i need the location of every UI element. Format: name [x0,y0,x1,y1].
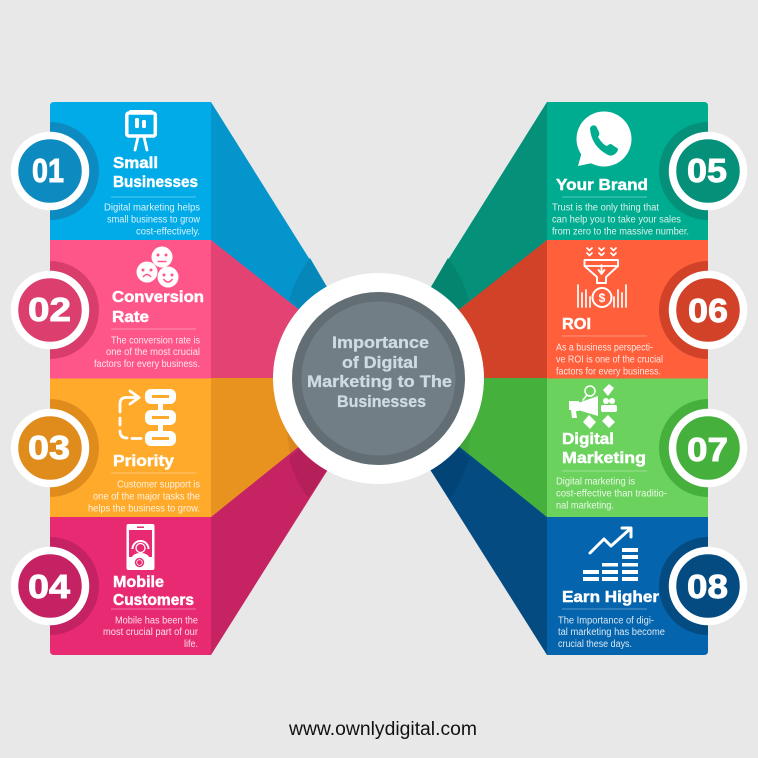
number badge 07 [659,399,744,497]
panel 01: small businesses [14,102,379,379]
card 08 [547,517,708,655]
number badge 06 [659,261,744,359]
card 02 [50,240,211,378]
description 02 [94,336,200,370]
heading 04: Customers [113,592,194,609]
central title: Marketing to The [307,373,452,391]
description 01: small business to grow [107,214,201,226]
heading 02: Conversion [112,289,204,306]
heading 07 [562,431,646,467]
icon: priority flow [120,389,176,446]
panel 05: your brand [379,102,744,379]
description 01: Digital marketing helps [104,202,200,214]
panel 03: priority [14,378,379,517]
description 07 [556,476,667,512]
description 03: one of the major tasks the [93,492,200,502]
description 01: cost-effectively. [136,226,200,238]
panel 06: ROI [379,240,744,379]
heading 04: Mobile [113,574,164,591]
fold 01 [211,102,379,379]
description 08 [558,616,665,650]
description 06: ve ROI is one of the crucial [556,354,663,366]
description 04: life. [184,639,198,650]
heading 07: Marketing [562,450,646,467]
card 04 [50,517,211,655]
description 04: most crucial part of our [103,627,199,638]
panel 04: mobile customers [14,379,379,655]
icon: funnel with coin: $ [599,291,606,305]
description 06: As a business perspecti- [556,342,653,354]
panel 07: digital marketing [379,378,744,517]
heading 06: ROI [562,316,591,333]
central title: Importance [332,334,429,352]
fold 07 [379,378,547,517]
heading 02: Rate [112,309,149,326]
number badge 08: 08 [687,568,728,605]
fold 05 [379,102,547,379]
central title: Businesses [337,393,426,411]
number badge 04: 04 [28,568,71,605]
icon: presentation board [127,110,155,150]
description 06: factors for every business. [556,366,661,378]
card 07 [547,378,708,517]
card 05 [547,102,708,240]
number badge 02: 02 [28,291,71,328]
description 05: Trust is the only thing that [552,202,659,214]
number badge 06: 06 [688,292,728,329]
icon: three faces [136,246,178,288]
fold 08 [379,379,547,655]
number badge 05: 05 [687,152,727,189]
description 03 [88,480,200,514]
number badge 04 [14,537,99,635]
description 07: Digital marketing is [556,476,635,488]
heading 01: Small [113,155,158,172]
description 08: crucial these days. [558,639,632,650]
description 02: one of the most crucial [106,347,200,358]
central title: of Digital [342,354,418,372]
number badge 01 [14,122,99,220]
fold 06 [379,240,547,379]
icon: rising chart [583,528,638,581]
icon: funnel with coin [578,248,626,307]
heading 07: Digital [562,431,614,448]
central circle [273,273,484,484]
description 08: tal marketing has become [558,627,665,638]
number badge 02 [14,261,99,359]
description 01 [104,202,201,238]
number badge 03: 03 [28,429,70,466]
number badge 07: 07 [687,431,728,468]
number badge 05 [659,122,744,220]
fold 03 [211,378,379,517]
footer website: www.ownlydigital.com [288,719,477,740]
card 06 [547,240,708,378]
description 03: helps the business to grow. [88,504,200,514]
number badge 03 [14,399,99,497]
heading 01: Businesses [113,174,198,191]
number badge 08 [659,537,744,635]
panel 02: conversion rate [14,240,379,379]
fold 02 [211,240,379,379]
number badge 01: 01 [32,152,64,189]
description 02: The conversion rate is [111,336,200,346]
description 07: cost-effective than traditio- [556,488,667,500]
card 03 [50,378,211,517]
icon: mobile support agent [126,524,154,570]
card 01 [50,102,211,240]
icon: megaphone and marketing symbols [569,384,617,429]
description 03: Customer support is [117,480,200,490]
fold 04 [211,379,379,655]
description 05 [552,202,689,238]
description 04 [103,616,199,650]
central title [307,334,452,411]
description 04: Mobile has been the [115,616,198,626]
icon: chat phone bubble [576,112,632,166]
panel 08: earn higher [379,379,744,655]
description 02: factors for every business. [94,359,200,370]
heading 04 [113,574,194,609]
description 08: The Importance of digi- [558,616,654,626]
description 07: nal marketing. [556,500,614,512]
heading 02 [112,289,204,326]
heading 08: Earn Higher [562,589,659,606]
heading 01 [113,155,198,191]
heading 03: Priority [113,453,174,470]
heading 05: Your Brand [556,177,648,194]
description 06 [556,342,663,378]
description 05: can help you to take your sales [552,214,681,226]
description 05: from zero to the massive number. [552,226,689,238]
